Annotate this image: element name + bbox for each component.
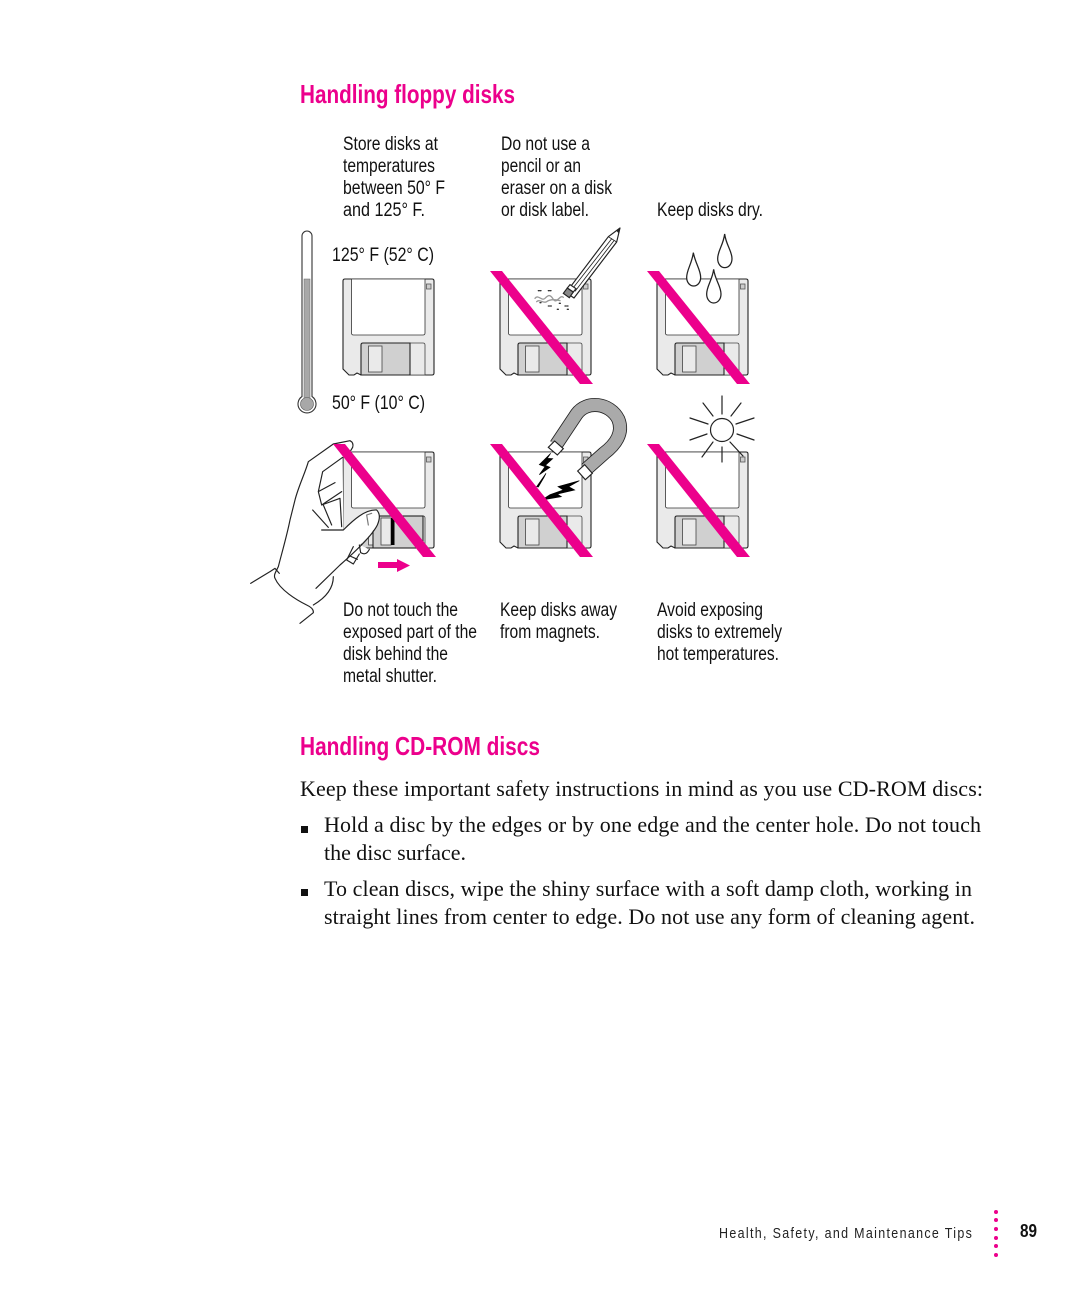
text block: do not use a pencil or eraser: eraser on a disk xyxy=(501,178,612,199)
panel: keep dry xyxy=(657,234,748,375)
icon: lightning bolts xyxy=(537,453,579,500)
text block: store disks at temperatures: and 125° F. xyxy=(343,200,425,221)
text block: keep away from magnets xyxy=(500,600,617,643)
bullet: hold a disc: Hold a disc by the edges or by one edge and the center hole. Do not touch xyxy=(324,812,981,837)
bullet: clean discs xyxy=(301,876,975,929)
text block: do not touch: disk behind the xyxy=(343,644,448,665)
text block: store disks at temperatures: Store disks at xyxy=(343,134,439,155)
slash: avoid hot temperatures xyxy=(647,444,750,557)
text block: avoid exposing: disks to extremely xyxy=(657,622,782,643)
panel: do not touch shutter xyxy=(251,441,434,623)
text block: do not touch: Do not touch the xyxy=(343,600,458,621)
bullet: hold a disc xyxy=(301,812,981,865)
text block: do not use a pencil or eraser: pencil or an xyxy=(501,156,581,177)
bullet: hold a disc: the disc surface. xyxy=(324,840,466,865)
icon: magnet xyxy=(548,405,620,480)
bullet: clean discs: To clean discs, wipe the shiny surface with a soft damp cloth, working in xyxy=(324,876,972,901)
icon: hand xyxy=(251,441,379,623)
slash: keep away from magnets xyxy=(490,444,593,557)
panel: avoid hot temperatures xyxy=(657,396,754,548)
text block: intro: Keep these important safety instructions in mind as you use CD-ROM discs: xyxy=(300,776,983,801)
arrow: shutter direction xyxy=(378,559,410,572)
bullet: clean discs: straight lines from center to edge. Do not use any form of cleaning agent. xyxy=(324,904,975,929)
text block: avoid exposing: Avoid exposing xyxy=(657,600,763,621)
eraser marks xyxy=(535,291,569,309)
text block: keep away from magnets: from magnets. xyxy=(500,622,600,643)
text block: store disks at temperatures: temperatures xyxy=(343,156,435,177)
text block: do not touch xyxy=(343,600,477,687)
text block: avoid exposing xyxy=(657,600,782,665)
panel: no pencil xyxy=(500,228,620,375)
icon: pencil xyxy=(563,228,620,298)
text block: keep disks dry: Keep disks dry. xyxy=(657,200,763,221)
icon: water drop left xyxy=(687,253,701,286)
text block: keep away from magnets: Keep disks away xyxy=(500,600,617,621)
text block: do not use a pencil or eraser xyxy=(501,134,612,221)
heading: Handling CD-ROM discs: Handling CD-ROM discs xyxy=(300,731,540,761)
footer: running title: Health, Safety, and Maintenance Tips xyxy=(719,1225,972,1241)
text block: do not use a pencil or eraser: Do not use a xyxy=(501,134,590,155)
icon: thermometer xyxy=(298,231,316,413)
label: 125 degrees F: 125° F (52° C) xyxy=(332,245,434,266)
slash: keep dry xyxy=(647,271,750,384)
text block: store disks at temperatures: between 50° F xyxy=(343,178,445,199)
footer: page number: 89 xyxy=(1020,1221,1037,1241)
text block: do not use a pencil or eraser: or disk label. xyxy=(501,200,589,221)
slash: no pencil xyxy=(490,271,593,384)
floppy disk: temperature xyxy=(343,279,434,375)
text block: avoid exposing: hot temperatures. xyxy=(657,644,779,665)
text block: store disks at temperatures xyxy=(343,134,445,221)
footer: dotted divider xyxy=(994,1210,998,1257)
slash: do not touch shutter xyxy=(333,444,436,557)
label: 50 degrees F: 50° F (10° C) xyxy=(332,393,425,414)
heading: Handling floppy disks: Handling floppy disks xyxy=(300,79,515,109)
text block: do not touch: metal shutter. xyxy=(343,666,437,687)
icon: water drop middle xyxy=(707,269,721,303)
icon: sun xyxy=(690,396,754,462)
panel: keep away from magnets xyxy=(500,405,620,548)
text block: do not touch: exposed part of the xyxy=(343,622,477,643)
icon: water drop top xyxy=(718,234,732,268)
